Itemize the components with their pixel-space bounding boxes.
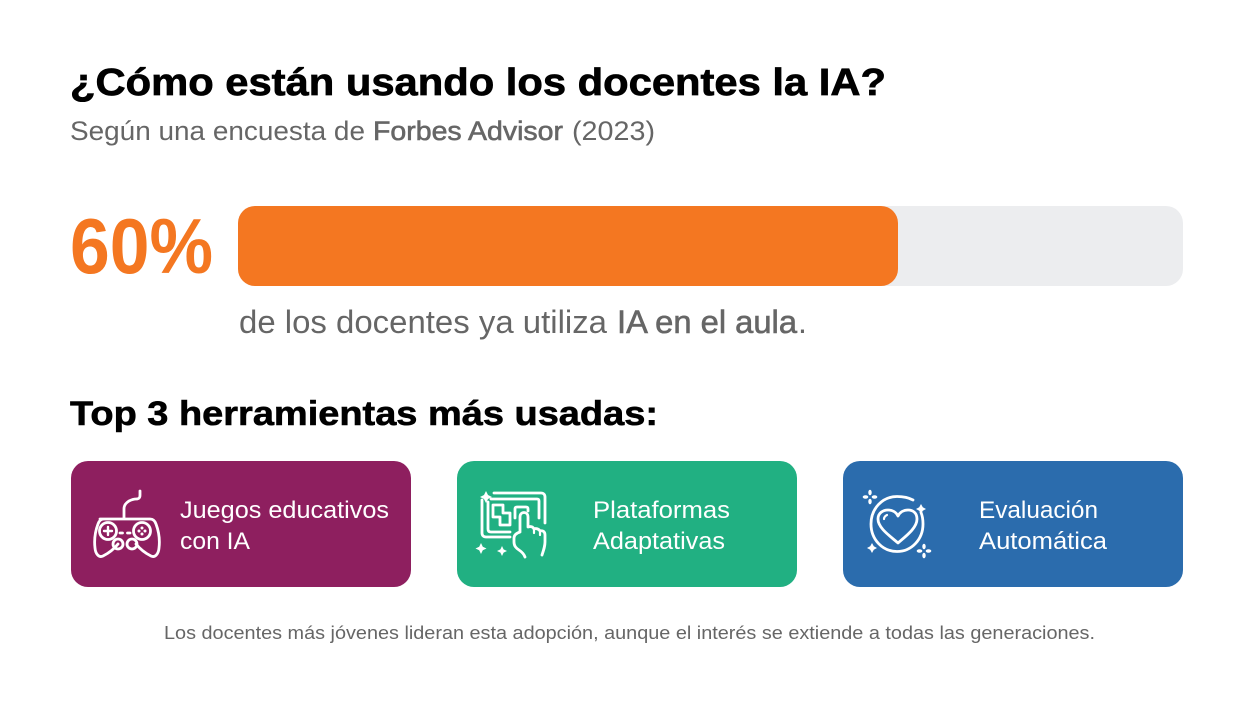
big percentage: 60% — [70, 202, 213, 290]
panel: plataformas adaptativas — [457, 461, 797, 587]
bar caption: IA en el aula — [617, 304, 797, 340]
label: con IA — [180, 528, 250, 555]
label: Adaptativas — [593, 528, 725, 555]
label: Automática — [979, 528, 1108, 555]
section heading: Top 3 herramientas más usadas: — [70, 395, 658, 433]
label: Plataformas — [593, 497, 730, 524]
subtitle: Forbes Advisor — [373, 116, 563, 146]
panel: evaluación automática — [843, 461, 1183, 587]
icon: heart in a circle with sparkles — [863, 490, 931, 558]
subtitle: (2023) — [572, 116, 655, 146]
bar caption: . — [798, 304, 807, 340]
icon: maze touched by a hand — [476, 491, 545, 557]
label: Juegos educativos — [180, 497, 389, 524]
bar caption: de los docentes ya utiliza — [239, 304, 607, 340]
icon: game controller — [95, 491, 159, 557]
footnote: Los docentes más jóvenes lideran esta adopción, aunque el interés se extiende a todas las generaciones. — [164, 622, 1095, 643]
progress bar — [238, 206, 1183, 286]
title: ¿Cómo están usando los docentes la IA? — [70, 62, 886, 104]
panel: juegos educativos — [71, 461, 411, 587]
subtitle: Según una encuesta de — [70, 116, 365, 146]
label: Evaluación — [979, 497, 1098, 524]
